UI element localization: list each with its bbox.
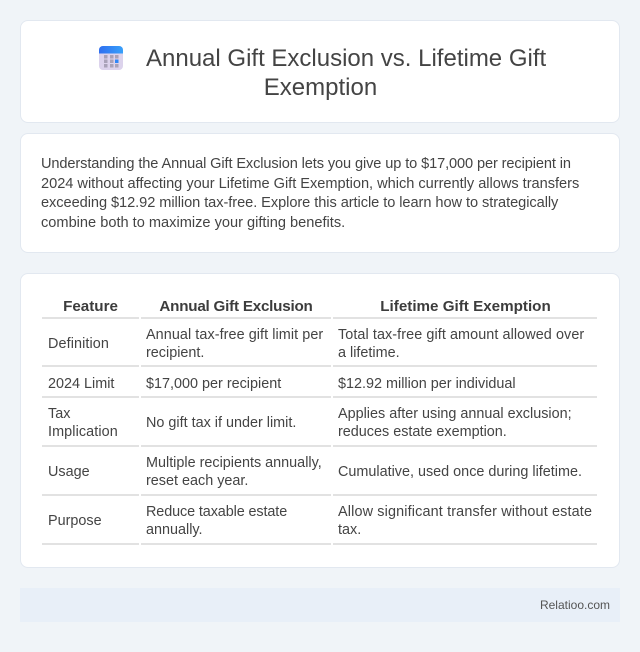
row: tax implication: Applies after using annual exclusion; [338, 406, 572, 422]
title: Annual Gift Exclusion vs. Lifetime Gift [146, 45, 546, 72]
row: purpose: Purpose [48, 513, 102, 529]
table header: Lifetime Gift Exemption [380, 298, 551, 315]
row: purpose: annually. [146, 522, 203, 538]
row: definition: recipient. [146, 345, 204, 361]
comparison table [42, 298, 597, 545]
icon: calendar [99, 46, 123, 70]
table header [63, 298, 551, 315]
row: purpose: Reduce taxable estate [146, 504, 287, 520]
row: definition: Total tax-free gift amount allowed over [338, 327, 584, 343]
row: usage: Cumulative, used once during lifetime. [338, 464, 582, 480]
row: usage: reset each year. [146, 473, 248, 489]
row: definition: Definition [48, 336, 109, 352]
row: tax implication: Tax [48, 406, 70, 422]
text block: introduction: exceeding $12.92 million tax-free. Explore this article to learn how to strategically [41, 195, 558, 211]
text block: introduction: 2024 without affecting your Lifetime Gift Exemption, which currently allows transfers [41, 176, 579, 192]
text block: introduction: Understanding the Annual Gift Exclusion lets you give up to $17,000 per recipient in [41, 156, 571, 172]
row: 2024 limit: $17,000 per recipient [146, 376, 281, 392]
footer text: Relatioo.com [540, 598, 610, 612]
row: 2024 limit: $12.92 million per individual [338, 376, 516, 392]
title: Exemption [264, 74, 377, 101]
table header: Feature [63, 298, 118, 315]
row: usage: Usage [48, 464, 90, 480]
row: usage [48, 455, 582, 489]
row: tax implication: No gift tax if under limit. [146, 415, 296, 431]
row: 2024 limit [48, 376, 516, 392]
row: definition: Annual tax-free gift limit per [146, 327, 323, 343]
panel: title card [20, 20, 620, 123]
panel: introduction [20, 133, 620, 253]
title [146, 45, 546, 101]
table header: Annual Gift Exclusion [159, 298, 313, 315]
row: usage: Multiple recipients annually, [146, 455, 322, 471]
row: tax implication [48, 406, 572, 440]
row: tax implication: Implication [48, 424, 118, 440]
row: tax implication: reduces estate exemption. [338, 424, 507, 440]
row: purpose [48, 504, 592, 538]
panel: comparison table [20, 273, 620, 568]
row: definition [48, 327, 584, 361]
text block: introduction: combine both to maximize your gifting benefits. [41, 214, 345, 230]
row: definition: a lifetime. [338, 345, 400, 361]
row: purpose: Allow significant transfer without estate [338, 504, 592, 520]
row: 2024 limit: 2024 Limit [48, 376, 114, 392]
row: purpose: tax. [338, 522, 361, 538]
text block: introduction [41, 156, 579, 230]
footer bar [20, 588, 620, 622]
